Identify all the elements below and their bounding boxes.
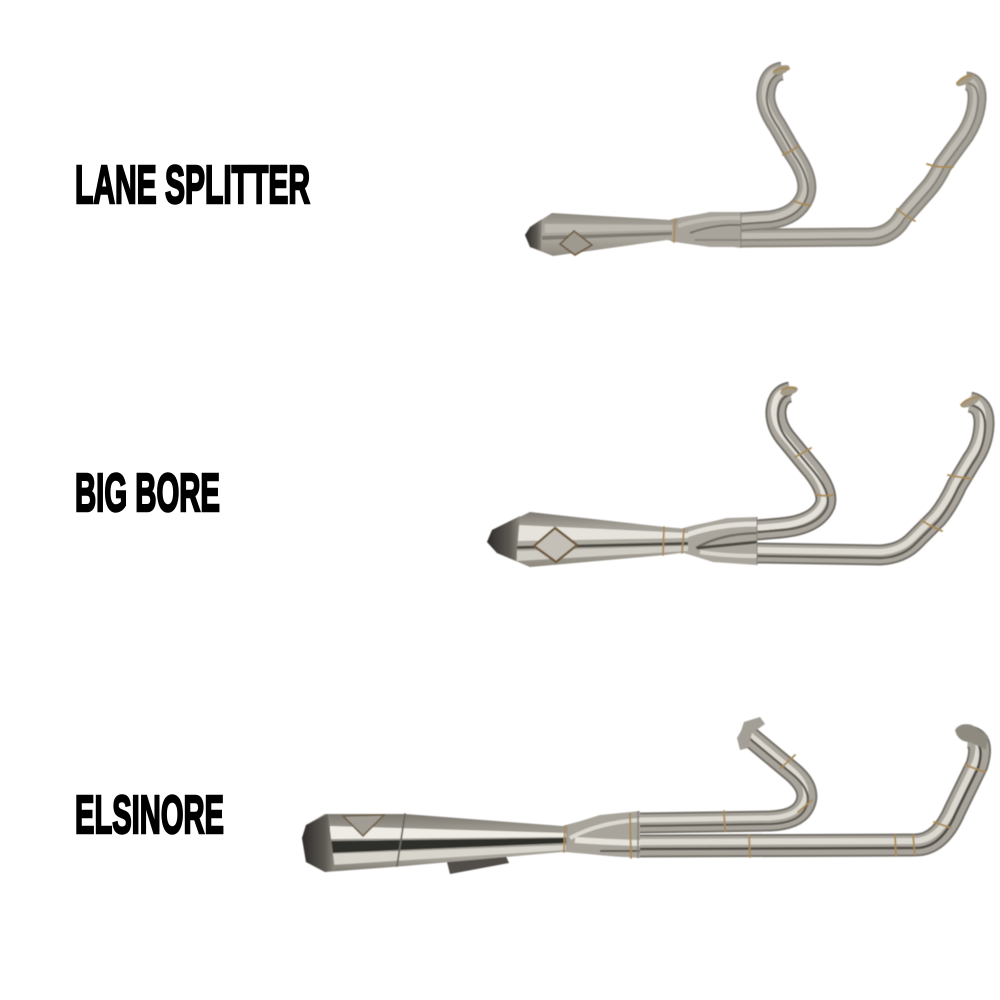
welds bbox=[397, 755, 985, 866]
muffler badge bbox=[560, 231, 592, 255]
exhaust: Big Bore bbox=[487, 385, 985, 567]
muffler tip bbox=[487, 516, 520, 561]
front header pipe bbox=[559, 732, 808, 841]
muffler shading bbox=[330, 826, 566, 865]
collector sleeve edges bbox=[637, 811, 639, 858]
mounting bracket bbox=[447, 854, 509, 874]
title: Lane Splitter: LANE SPLITTER bbox=[75, 155, 310, 215]
collector sleeve edge bbox=[756, 517, 758, 565]
header flange bbox=[737, 717, 765, 750]
rear header pipe bbox=[559, 733, 981, 849]
welds bbox=[663, 387, 979, 555]
collector highlights bbox=[684, 524, 757, 556]
collector sleeve edge bbox=[740, 212, 742, 248]
muffler tip bbox=[302, 814, 335, 872]
muffler shading bbox=[542, 224, 672, 240]
rear header end bbox=[955, 724, 988, 750]
collector bbox=[684, 517, 757, 565]
collector highlights bbox=[678, 218, 741, 240]
title: Elsinore: ELSINORE bbox=[75, 785, 224, 845]
collector highlights bbox=[570, 820, 640, 851]
muffler badge bbox=[343, 815, 384, 836]
title: Big Bore: BIG BORE bbox=[75, 463, 220, 523]
pipe end caps bbox=[771, 63, 976, 88]
collector bbox=[565, 811, 640, 858]
muffler shading bbox=[517, 525, 688, 561]
rear header pipe bbox=[679, 399, 985, 558]
exhaust: Lane Splitter bbox=[525, 63, 978, 256]
muffler bbox=[487, 512, 688, 567]
collector bbox=[675, 212, 741, 247]
front header pipe bbox=[671, 69, 808, 231]
front header pipe bbox=[678, 390, 828, 542]
muffler tip bbox=[525, 219, 542, 251]
exhaust: Elsinore bbox=[302, 717, 988, 874]
muffler badge bbox=[534, 528, 577, 562]
pipe end caps bbox=[779, 385, 981, 410]
muffler bbox=[525, 213, 678, 256]
welds bbox=[674, 68, 971, 242]
rear header pipe bbox=[671, 79, 978, 240]
muffler bbox=[302, 814, 568, 872]
